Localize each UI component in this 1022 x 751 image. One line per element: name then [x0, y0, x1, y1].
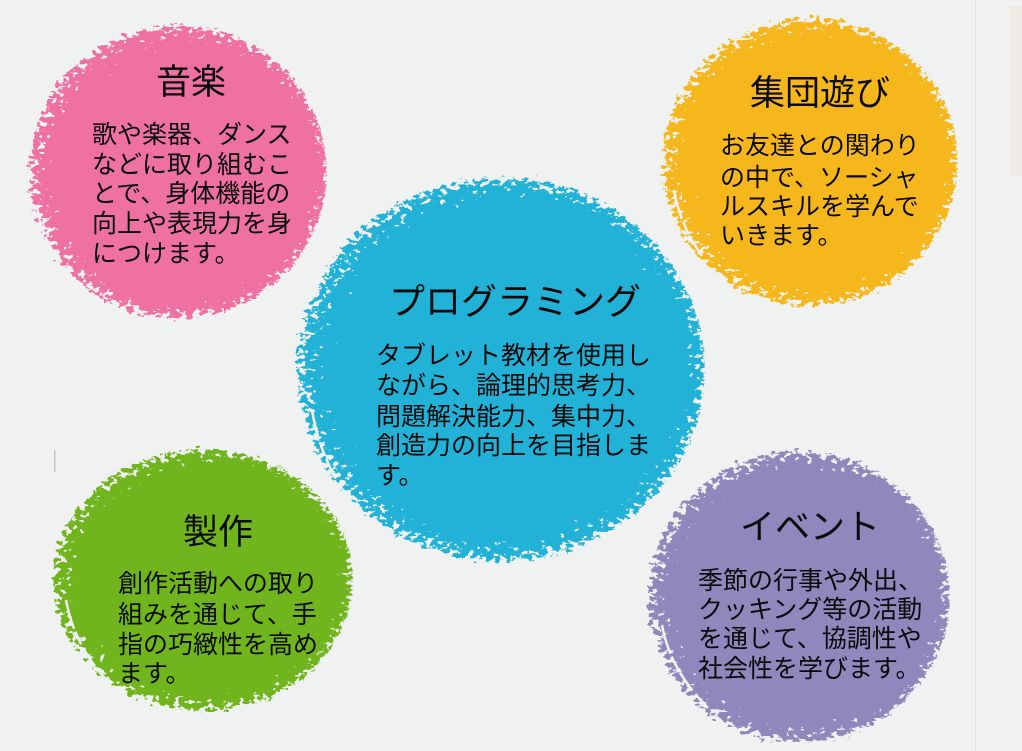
heading: programming: プログラミング — [389, 281, 641, 322]
text: crafts description: 創作活動への取り — [118, 570, 318, 598]
crayon circle: blue — [298, 177, 706, 561]
text: programming description: 問題解決能力、集中力、 — [376, 403, 651, 431]
text: music description: につけます。 — [92, 240, 240, 268]
text: crafts description: ます。 — [118, 660, 191, 688]
text: group play description: の中で、ソーシャ — [720, 164, 919, 192]
heading: music: 音楽 — [156, 63, 226, 102]
text: group play description: お友達との関わり — [720, 132, 920, 160]
heading: group play: 集団遊び — [750, 74, 890, 113]
text: events description: を通じて、協調性や — [698, 625, 922, 653]
text: music description: 歌や楽器、ダンス — [92, 121, 292, 149]
text: programming description: す。 — [376, 462, 424, 490]
text: programming description: ながら、論理的思考力、 — [376, 372, 651, 400]
text: music description: 向上や表現力を身 — [92, 210, 292, 238]
panel: crafts — [54, 449, 354, 711]
crayon circle: green — [54, 449, 354, 711]
panel: music — [30, 25, 328, 319]
text: crafts description: 組みを通じて、手 — [118, 601, 317, 629]
text: music description: とで、身体機能の — [92, 180, 290, 208]
text: programming description: タブレット教材を使用し — [376, 342, 651, 370]
crayon circle: pink — [30, 25, 328, 319]
crayon circle: yellow — [663, 18, 959, 306]
text: crafts description: 指の巧緻性を高め — [118, 631, 318, 659]
text: events description: 社会性を学びます。 — [698, 655, 921, 683]
crayon circle: purple — [649, 451, 951, 743]
panel: group play — [663, 18, 959, 306]
heading: events: イベント — [740, 508, 880, 547]
text: events description: 季節の行事や外出、 — [698, 567, 923, 595]
panel: programming — [298, 177, 706, 561]
text: group play description: ルスキルを学んで — [720, 193, 919, 221]
text: music description: などに取り組むこ — [92, 151, 292, 179]
text: programming description: 創造力の向上を目指しま — [376, 432, 651, 460]
text: events description: クッキング等の活動 — [698, 596, 922, 624]
panel: events — [649, 451, 951, 743]
text: group play description: いきます。 — [720, 222, 843, 250]
heading: crafts: 製作 — [183, 513, 253, 552]
